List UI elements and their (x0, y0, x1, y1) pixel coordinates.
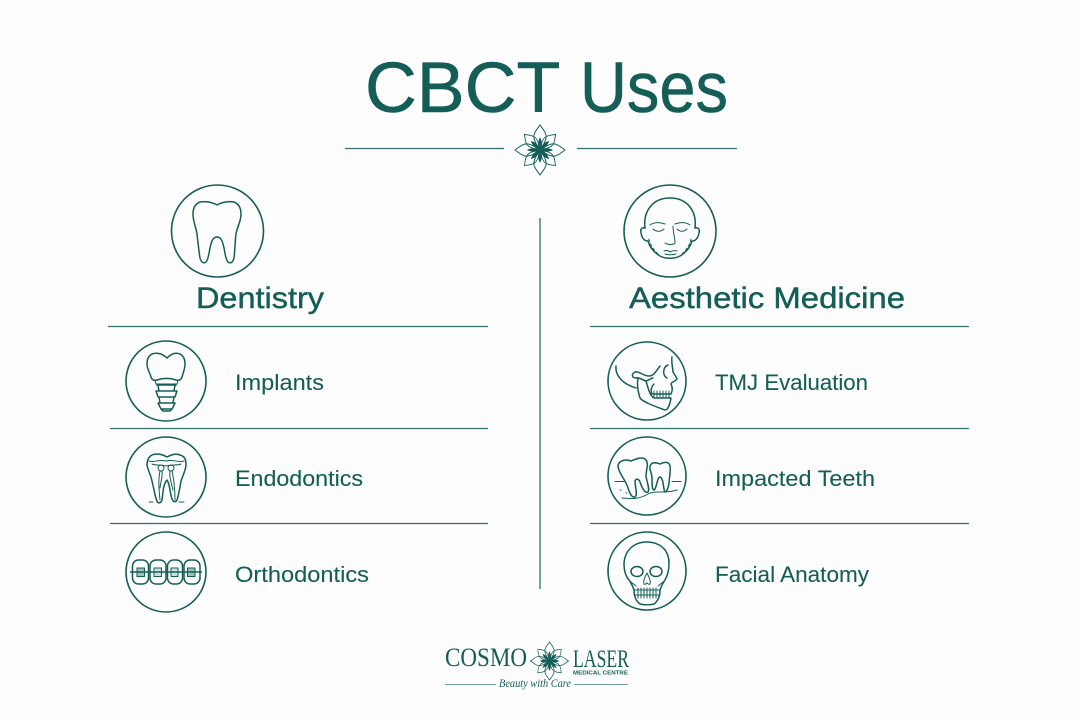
logo wordmark: LASER: LASER (573, 646, 629, 673)
icon: skull (608, 532, 686, 610)
logo wordmark: COSMO: COSMO (445, 643, 527, 672)
row: Facial Anatomy (608, 532, 869, 610)
title: CBCT (365, 49, 559, 128)
label: TMJ Evaluation (715, 370, 868, 395)
icon: impacted teeth (608, 437, 686, 515)
icon: tooth with root canals (126, 437, 206, 517)
heading: Dentistry: Dentistry (196, 282, 324, 315)
title divider with flower ornament (345, 125, 737, 175)
logo flower (530, 642, 568, 680)
logo subline: MEDICAL CENTRE (573, 670, 628, 676)
centre vertical divider (539, 218, 541, 589)
icon: tooth (172, 185, 264, 277)
row: TMJ Evaluation (608, 342, 868, 420)
icon: braces (126, 532, 206, 612)
label: Endodontics (235, 466, 363, 491)
heading: Aesthetic Medicine: Aesthetic Medicine (629, 282, 905, 315)
logo: Cosmo Laser Medical Centre (445, 642, 629, 690)
panel: aesthetic medicine (590, 185, 969, 610)
label: Impacted Teeth (715, 466, 875, 491)
panel: dentistry (108, 185, 488, 612)
icon: jaw skull profile (608, 342, 686, 420)
row: Endodontics (126, 437, 363, 517)
label: Facial Anatomy (715, 562, 869, 587)
label: Implants (235, 370, 324, 395)
icon: implant (126, 341, 206, 421)
icon: face (624, 185, 716, 277)
logo tagline: Beauty with Care (499, 676, 572, 690)
row: Implants (126, 341, 324, 421)
row: Impacted Teeth (608, 437, 875, 515)
title: Uses (580, 49, 728, 128)
row: Orthodontics (126, 532, 369, 612)
label: Orthodontics (235, 562, 369, 587)
